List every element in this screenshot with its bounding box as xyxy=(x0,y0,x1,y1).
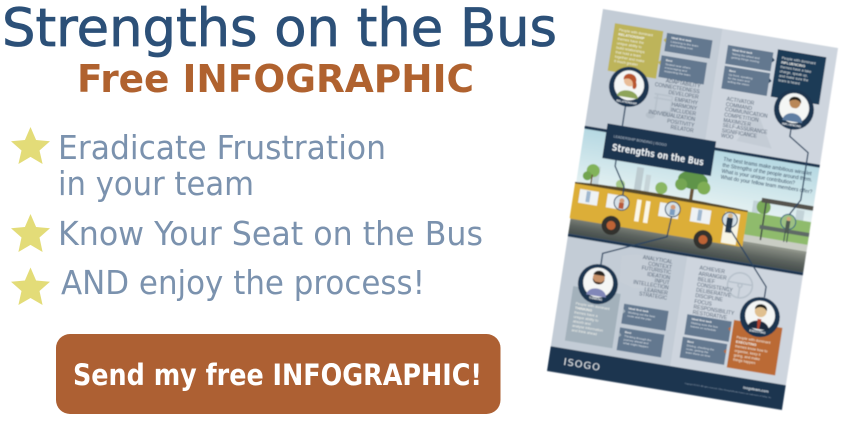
panel: executing: themes know how to xyxy=(735,344,768,354)
note boxes: bottom left: journey ahead and xyxy=(622,337,649,346)
ghost icons xyxy=(617,92,779,307)
strengths list: influencing: COMMUNICATION xyxy=(725,107,768,120)
note boxes: bottom left: what might happen xyxy=(623,341,649,349)
bullet: eradicate frustration: in your team xyxy=(58,164,254,203)
strengths list: influencing: WOO xyxy=(721,133,734,141)
note boxes: bottom left: route and the plan xyxy=(627,314,652,322)
panel: influencing: charge, speak up, xyxy=(779,69,808,78)
note boxes: top right: Taking the wheel and xyxy=(731,52,760,60)
strengths list: relationship: HARMONY xyxy=(671,102,698,112)
poster footer: isogoteam.com xyxy=(743,385,769,394)
strengths list: relationship: EMPATHY xyxy=(674,97,699,107)
strengths list: executing: RESPONSIBILITY xyxy=(693,304,735,317)
note boxes: top right: Best xyxy=(729,69,736,74)
poster footer: ISOGO xyxy=(563,357,602,374)
panel: thinking: and think ahead xyxy=(571,328,597,337)
strengths list: influencing: MAXIMIZER xyxy=(723,118,752,128)
note boxes: top right: selling the vision xyxy=(727,79,750,87)
strengths list: executing: FOCUS xyxy=(694,299,713,308)
panel: influencing: and make sure the xyxy=(779,74,809,83)
panel: executing: People with dominant xyxy=(736,336,771,345)
panel: executing: organise, keep it xyxy=(734,349,761,357)
scene: sky and road band xyxy=(568,128,820,273)
bus xyxy=(568,180,748,257)
intro text: What is your unique contribution? xyxy=(721,169,795,187)
panel: thinking xyxy=(565,286,621,348)
note boxes: bottom right: route, getting the xyxy=(686,347,709,355)
strengths list: influencing: SIGNIFICANCE xyxy=(721,128,758,140)
strengths list: thinking: INPUT xyxy=(654,278,670,287)
strengths list: thinking: LEARNER xyxy=(644,287,669,297)
note boxes: bottom right: Driving, checking the xyxy=(686,344,715,352)
button: Send my free INFOGRAPHIC! xyxy=(73,358,482,392)
strengths list: thinking: STRATEGIC xyxy=(639,291,668,302)
panel: thinking: absorb and xyxy=(573,320,591,326)
note boxes: top left xyxy=(656,32,713,85)
note boxes: top right: Ideal first task xyxy=(732,48,753,55)
portrait: influencing xyxy=(771,87,817,133)
panel: relationship: build relationships xyxy=(616,46,645,54)
note boxes: top left: encouraging and xyxy=(665,65,688,73)
note boxes: top left: and building trust xyxy=(670,43,693,51)
poster footer xyxy=(547,346,786,410)
panel: relationship xyxy=(608,23,663,79)
bullet: eradicate frustration: Eradicate Frustration xyxy=(58,128,386,167)
panel: influencing: INFLUENCING xyxy=(781,60,806,68)
note boxes: bottom right: Best xyxy=(687,340,694,345)
strengths list: executing: BELIEF xyxy=(697,277,715,285)
note boxes: top right xyxy=(721,45,776,96)
connector lines xyxy=(599,102,811,301)
note boxes: top left: Best xyxy=(666,58,673,63)
strengths list: relationship: ADAPTABILITY xyxy=(665,78,701,90)
note boxes: bottom right: leaves on schedule xyxy=(690,324,717,333)
panel: influencing: themes have a take xyxy=(780,65,812,74)
strengths list: executing: RESTORATIVE xyxy=(692,310,728,322)
panel: executing: EXECUTING xyxy=(735,340,757,347)
strengths list: thinking: ANALYTICAL xyxy=(642,255,673,266)
note boxes: bottom right: Making sure the bus xyxy=(691,321,719,329)
note boxes: top left: Listening to the team xyxy=(671,40,699,48)
intro text: What do your fellow team members offer? xyxy=(720,175,813,196)
portrait: executing: EXECUTING xyxy=(749,329,766,335)
icon: star 2 xyxy=(11,214,50,252)
panel: influencing xyxy=(771,49,826,105)
portrait: relationship: RELATIONSHIP xyxy=(616,99,637,106)
portrait: influencing: INFLUENCING xyxy=(782,121,801,129)
note boxes: bottom left: Best xyxy=(625,330,632,335)
note boxes: top right: getting things moving xyxy=(731,55,760,64)
panel: thinking: analyse information xyxy=(572,324,603,333)
note boxes: top left: Seated near others xyxy=(665,62,691,70)
intro text: The best teams make ambitious wins-let xyxy=(723,157,812,178)
panel: thinking: unique ability to xyxy=(573,315,599,323)
panel: relationship: RELATIONSHIP xyxy=(618,32,645,41)
strengths list: relationship: INCLUDER xyxy=(670,108,697,118)
strengths list: executing: ARRANGER xyxy=(698,271,727,282)
panel: relationship: unique ability to xyxy=(617,41,642,49)
portrait: thinking: THINKING xyxy=(589,296,603,302)
note boxes: top left: Ideal first task xyxy=(671,36,692,43)
portrait: executing xyxy=(737,294,783,340)
shelter xyxy=(756,198,813,248)
button xyxy=(56,334,500,414)
note boxes: bottom left xyxy=(617,304,669,358)
strengths list: thinking: FUTURISTIC xyxy=(641,265,672,276)
strengths list: executing: CONSISTENCY xyxy=(696,282,734,294)
portrait: relationship xyxy=(606,64,652,110)
strengths list: relationship: DEVELOPER xyxy=(668,90,699,101)
panel: executing: going, and make xyxy=(733,353,760,362)
portrait: thinking xyxy=(575,261,621,307)
strengths list: thinking: INTELLECTION xyxy=(633,280,669,292)
panel: thinking: People with dominant xyxy=(575,302,610,311)
note boxes: top right: Up front, speaking xyxy=(728,73,753,81)
note boxes: bottom right: Ideal first task xyxy=(691,317,712,324)
panel: relationship: that hold a team xyxy=(615,50,641,58)
poster footer: Copyright ISOGO. All rights reserved. Clifton StrengthsFinder themes are trademarks of Gallup, Inc. xyxy=(684,382,772,399)
strengths list: relationship: CONNECTEDNESS xyxy=(654,82,701,96)
figure at bus stop xyxy=(778,213,797,243)
icon: star 3 xyxy=(11,268,50,305)
note boxes: bottom left: Ideal first task xyxy=(628,306,649,314)
strengths list: relationship: RELATOR xyxy=(670,125,694,134)
panel: thinking: THINKING xyxy=(575,306,593,313)
title panel xyxy=(602,123,716,176)
strengths list: executing: DELIBERATIVE xyxy=(696,288,732,300)
strengths list: thinking: IDEATION xyxy=(647,272,671,281)
panel: relationship: together and make xyxy=(615,55,645,64)
band lines xyxy=(584,126,820,168)
strengths list: influencing: ACTIVATOR xyxy=(726,97,755,107)
strengths list: executing: DISCIPLINE xyxy=(695,293,724,304)
bullet: enjoy the process: AND enjoy the process! xyxy=(61,263,425,302)
panel: influencing: People with dominant xyxy=(781,56,816,66)
panel: executing: things happen xyxy=(733,358,756,365)
note boxes: bottom left: Thinking through the xyxy=(624,334,652,343)
panel: thinking: themes have a xyxy=(574,311,598,318)
strengths list: relationship: INDIVIDUALIZATION xyxy=(648,110,696,123)
title panel: LEADERSHIP BONDING | ISOGO xyxy=(613,135,667,147)
strengths list: executing: ACHIEVER xyxy=(699,266,726,276)
note boxes: bottom left: Working out the best xyxy=(628,310,655,319)
subtitle: Free INFOGRAPHIC xyxy=(77,57,474,101)
bullet: know your seat: Know Your Seat on the Bus xyxy=(58,214,483,253)
panel: relationship: it much greater xyxy=(614,59,639,67)
strengths list: influencing: SELF-ASSURANCE xyxy=(722,123,768,136)
strengths list: relationship: POSITIVITY xyxy=(667,118,695,129)
icon: star 1 xyxy=(11,127,50,164)
intro text: the Strengths of the people around them. xyxy=(722,163,813,184)
panel: influencing: team is heard xyxy=(778,78,800,86)
title panel: Strengths on the Bus xyxy=(611,142,705,169)
note boxes: top right: for the team and xyxy=(728,76,750,84)
panel: executing xyxy=(727,320,782,375)
note boxes: top left: supporting the team xyxy=(664,69,691,77)
strengths list: influencing: COMMAND xyxy=(725,102,753,112)
note boxes: bottom right xyxy=(680,314,732,365)
panel: relationship: People with dominant xyxy=(619,28,653,38)
strengths list: influencing: COMPETITION xyxy=(724,112,759,124)
poster thumbnail xyxy=(546,9,838,410)
panel: relationship: themes have the xyxy=(617,37,644,45)
note boxes: bottom right: team there on time xyxy=(685,350,711,359)
strengths list: thinking: CONTEXT xyxy=(648,261,672,271)
